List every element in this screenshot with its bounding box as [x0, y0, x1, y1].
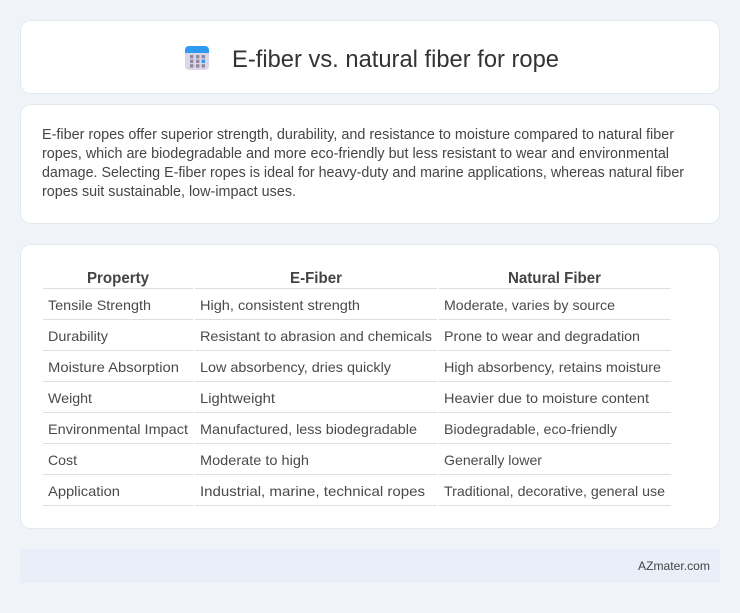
- row: moisture absorption: [48, 359, 661, 375]
- row: moisture absorption: High absorbency, retains moisture: [444, 359, 661, 375]
- row: durability: Durability: [48, 328, 108, 344]
- table header: Natural Fiber: [508, 270, 601, 287]
- row: application: Industrial, marine, technical ropes: [200, 483, 425, 499]
- table header: E-Fiber: [290, 270, 342, 287]
- row: environmental impact: [48, 421, 617, 437]
- row: application: [48, 483, 665, 499]
- row: tensile strength: Tensile Strength: [48, 297, 151, 313]
- text block: summary paragraph: [42, 127, 684, 200]
- row: weight: [48, 390, 649, 406]
- row: cost: [48, 452, 542, 468]
- row: application: Application: [48, 483, 120, 499]
- panel: summary: [20, 104, 720, 224]
- footer: [20, 549, 720, 583]
- panel: comparison table: [20, 244, 720, 528]
- row: moisture absorption: Low absorbency, dries quickly: [200, 359, 391, 375]
- row: moisture absorption: Moisture Absorption: [48, 359, 179, 375]
- row: application: Traditional, decorative, general use: [444, 483, 665, 499]
- row: weight: Weight: [48, 390, 92, 406]
- text block: summary paragraph: E-fiber ropes offer superior strength, durability, and resistance to moisture compared to natural fiber: [42, 127, 674, 143]
- table header: Property: [87, 270, 149, 287]
- row: weight: Heavier due to moisture content: [444, 390, 649, 406]
- row: cost: Generally lower: [444, 452, 542, 468]
- row: durability: [48, 328, 640, 344]
- icon: calendar grid: [185, 46, 209, 70]
- panel: title card: [20, 20, 720, 94]
- row: durability: Resistant to abrasion and chemicals: [200, 328, 432, 344]
- text block: summary paragraph: ropes suit sustainable, low-impact uses.: [42, 184, 296, 200]
- text block: summary paragraph: damage. Selecting E-fiber ropes is ideal for heavy-duty and marine applications, whereas natural fiber: [42, 165, 684, 181]
- title: E-fiber vs. natural fiber for rope: [232, 46, 559, 73]
- text block: summary paragraph: ropes, which are biodegradable and more eco-friendly but less resistant to wear and environmental: [42, 146, 669, 162]
- table header: [87, 270, 601, 287]
- row: environmental impact: Manufactured, less biodegradable: [200, 421, 417, 437]
- footer credit: AZmater.com: [638, 559, 710, 573]
- row: durability: Prone to wear and degradation: [444, 328, 640, 344]
- row: environmental impact: Biodegradable, eco-friendly: [444, 421, 617, 437]
- row: environmental impact: Environmental Impact: [48, 421, 188, 437]
- row: cost: Moderate to high: [200, 452, 309, 468]
- row: weight: Lightweight: [200, 390, 275, 406]
- row: tensile strength: Moderate, varies by source: [444, 297, 615, 313]
- row: tensile strength: [48, 297, 615, 313]
- row: cost: Cost: [48, 452, 77, 468]
- row: tensile strength: High, consistent strength: [200, 297, 360, 313]
